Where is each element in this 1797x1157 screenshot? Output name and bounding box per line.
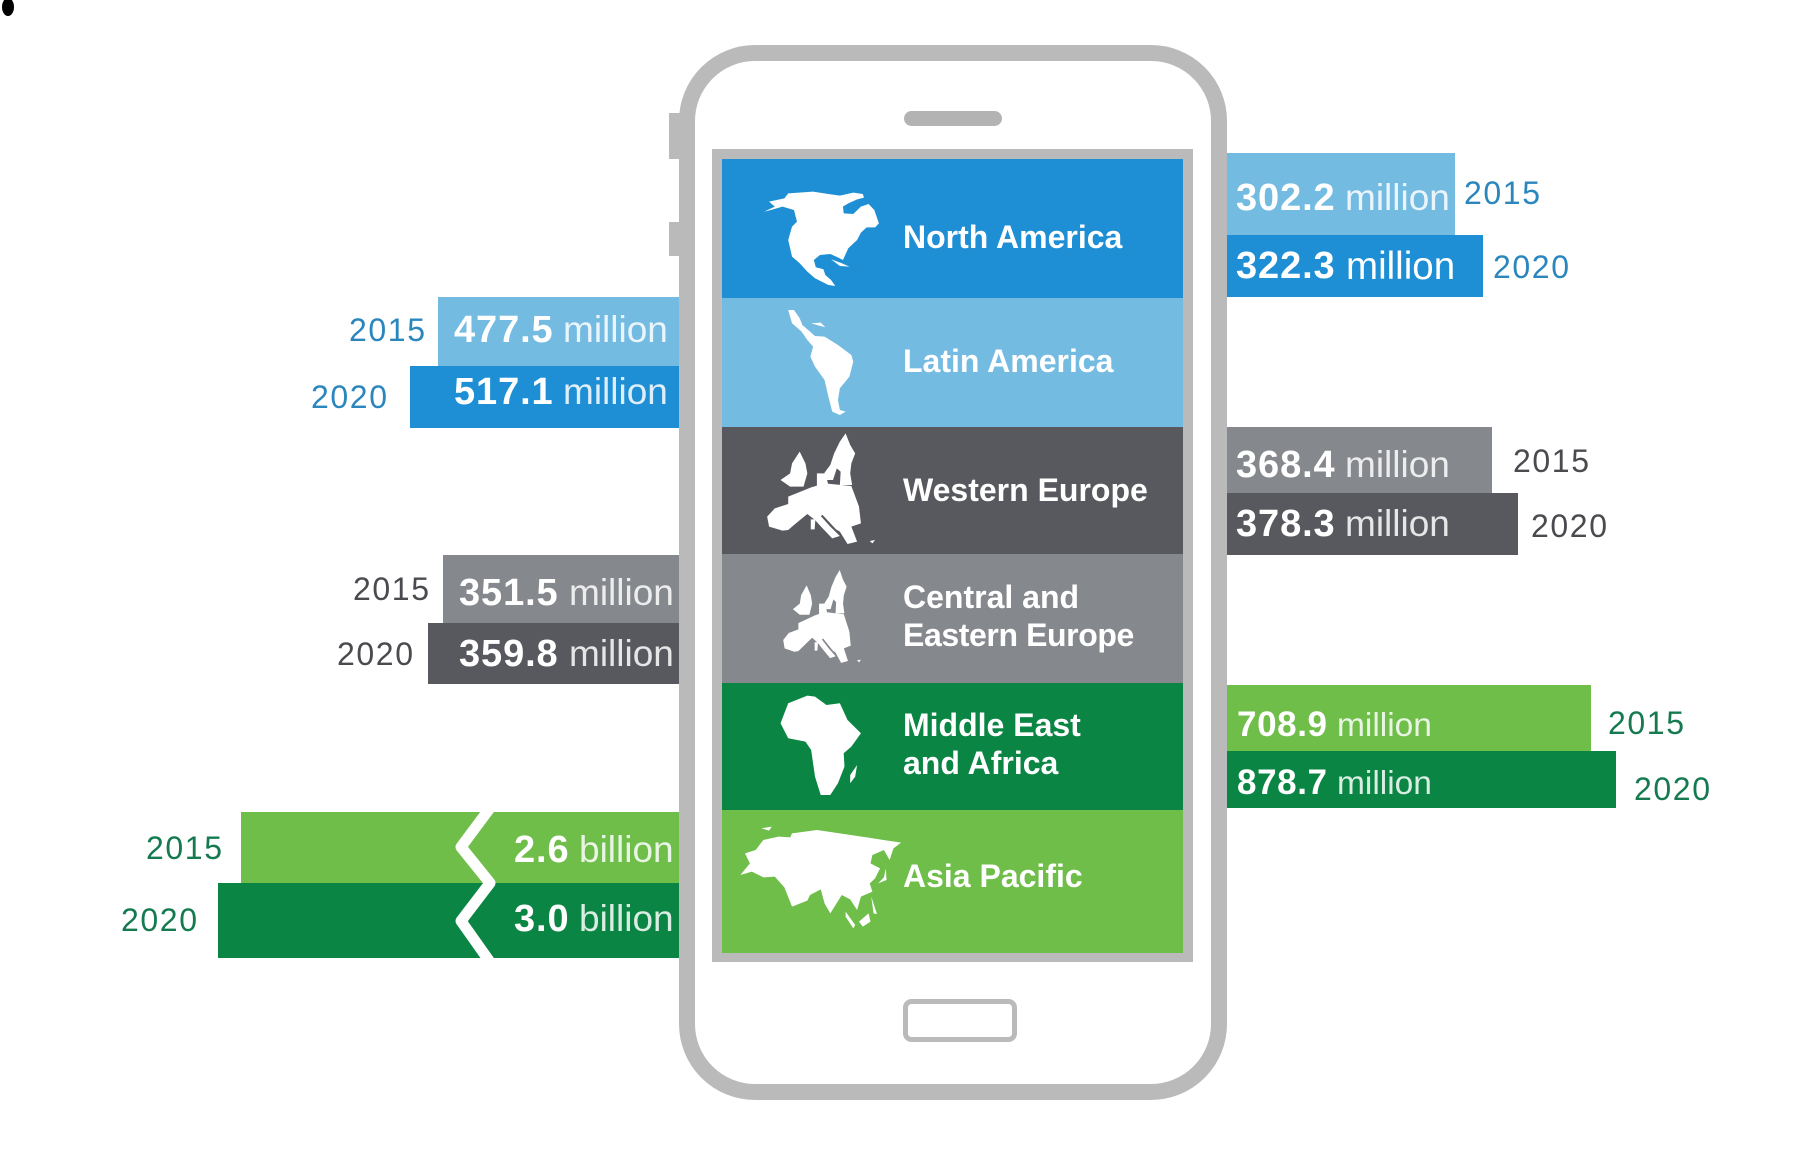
phone side buttons — [669, 113, 683, 256]
callout: North America figures: million — [1345, 177, 1450, 218]
panel: Central and Eastern Europe row — [722, 554, 1183, 683]
callout: Central and Eastern Europe figures: million — [569, 633, 674, 674]
callout: Latin America figures: million — [563, 371, 668, 412]
callout: Central and Eastern Europe figures: million — [569, 572, 674, 613]
callout: Middle East and Africa figures: 2020 — [1634, 771, 1712, 807]
phone screen frame — [712, 149, 1193, 962]
callout: Western Europe figures: million — [1345, 503, 1450, 544]
panel: Western Europe row — [722, 427, 1183, 554]
callout: Latin America figures: 2015 — [349, 312, 427, 348]
axis break marker — [461, 808, 490, 962]
callout: Middle East and Africa figures: 878.7 — [1237, 763, 1328, 802]
panel: Asia Pacific row — [722, 810, 1183, 953]
panel: Middle East and Africa row — [722, 683, 1183, 810]
callout: North America figures: 302.2 — [1236, 177, 1336, 219]
callout: Middle East and Africa figures: million — [1337, 707, 1432, 744]
icon: Central and Eastern Europe map — [783, 570, 861, 663]
callout: Latin America figures: million — [563, 309, 668, 350]
callout: Asia Pacific figures with axis break: 2.6 — [514, 829, 570, 871]
callout: Middle East and Africa figures — [1227, 685, 1712, 808]
callout: Central and Eastern Europe figures: 351.5 — [459, 572, 559, 614]
icon: North America map — [764, 192, 879, 286]
phone speaker — [904, 111, 1002, 126]
black dot artefact — [2, 0, 14, 16]
callout: Western Europe figures — [1227, 427, 1609, 555]
phone home button — [906, 1002, 1014, 1040]
callout: Latin America figures: 517.1 — [454, 371, 554, 413]
callout: Latin America figures: 477.5 — [454, 309, 554, 351]
icon: Latin America map — [788, 310, 853, 415]
label: Middle East and Africa: and Africa — [903, 745, 1058, 781]
callout: Middle East and Africa figures: million — [1337, 765, 1432, 802]
panel: North America row — [722, 159, 1183, 298]
callout: Central and Eastern Europe figures — [337, 555, 679, 684]
label: Middle East and Africa: Middle East — [903, 707, 1081, 743]
callout: Middle East and Africa figures: 2015 — [1608, 705, 1686, 741]
callout: Latin America figures — [311, 297, 679, 428]
callout: Middle East and Africa figures: 708.9 — [1237, 705, 1328, 744]
callout: Central and Eastern Europe figures: 2020 — [337, 636, 415, 672]
callout: North America figures: 2015 — [1464, 175, 1542, 211]
label: Central and Eastern Europe: Central and — [903, 579, 1079, 615]
callout: North America figures: 322.3 — [1236, 245, 1336, 287]
callout: Western Europe figures: 2020 — [1531, 508, 1609, 544]
icon: Asia Pacific map — [740, 827, 901, 928]
callout: North America figures: 2020 — [1493, 249, 1571, 285]
callout: Central and Eastern Europe figures: 2015 — [353, 571, 431, 607]
callout: Western Europe figures: million — [1345, 444, 1450, 485]
phone body — [687, 53, 1219, 1092]
callout: Asia Pacific figures with axis break: 2015 — [146, 830, 224, 866]
callout: Asia Pacific figures with axis break: 3.0 — [514, 898, 570, 940]
callout: Central and Eastern Europe figures: 359.8 — [459, 633, 559, 675]
label: Latin America: Latin America — [903, 343, 1114, 379]
label: North America: North America — [903, 219, 1123, 255]
callout: Western Europe figures: 378.3 — [1236, 503, 1336, 545]
callout: Asia Pacific figures with axis break: billion — [579, 898, 674, 939]
label: Western Europe: Western Europe — [903, 472, 1148, 508]
callout: Western Europe figures: 2015 — [1513, 443, 1591, 479]
callout: Western Europe figures: 368.4 — [1236, 444, 1336, 486]
label: Asia Pacific: Asia Pacific — [903, 858, 1083, 894]
callout: Latin America figures: 2020 — [311, 379, 389, 415]
callout: North America figures: million — [1346, 245, 1455, 288]
callout: Asia Pacific figures with axis break: 2020 — [121, 902, 199, 938]
panel: Latin America row — [722, 298, 1183, 427]
callout: Asia Pacific figures with axis break: billion — [579, 829, 674, 870]
callout: North America figures — [1227, 153, 1571, 297]
label: Central and Eastern Europe: Eastern Europe — [903, 617, 1134, 653]
phone illustration — [669, 53, 1219, 1092]
callout: Asia Pacific figures with axis break — [121, 808, 679, 962]
icon: Western Europe map — [767, 433, 875, 544]
icon: Africa map — [781, 696, 861, 795]
